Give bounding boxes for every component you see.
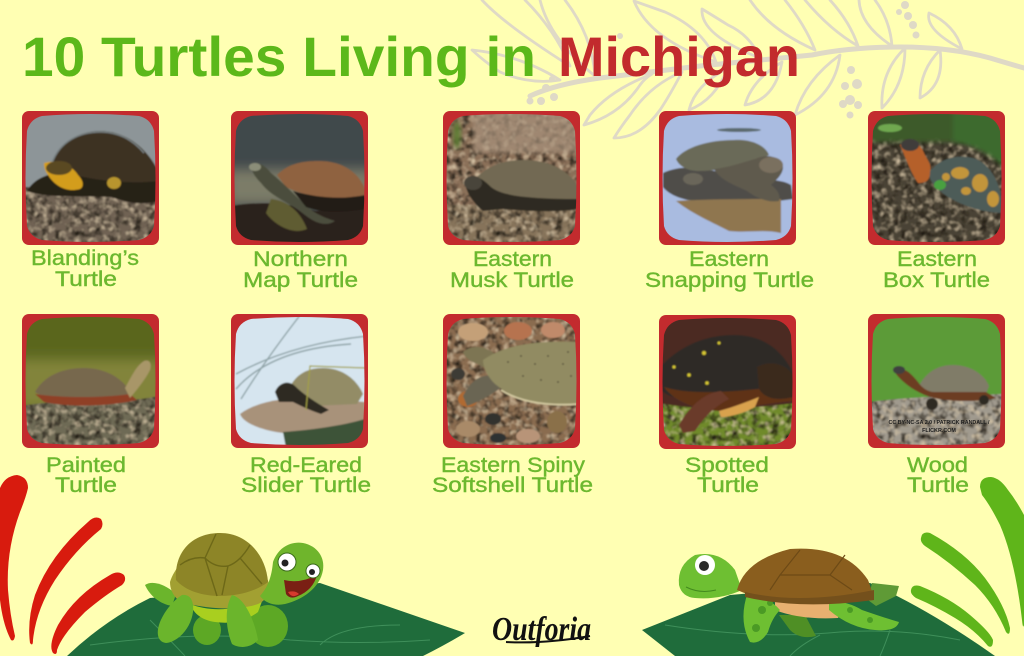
right cartoon turtle — [679, 549, 899, 643]
label: Eastern Spiny Softshell Turtle — [432, 454, 593, 497]
photo: Blanding's Turtle — [22, 111, 159, 245]
title — [22, 25, 800, 88]
label: Wood Turtle — [907, 454, 969, 497]
label: Red-Eared Slider Turtle: Slider Turtle — [241, 474, 371, 497]
label: Painted Turtle — [46, 454, 126, 497]
label: Eastern Spiny Softshell Turtle: Eastern Spiny — [441, 454, 586, 477]
photo: Eastern Snapping Turtle — [659, 111, 796, 245]
panel: Wood Turtle — [868, 314, 1005, 492]
label: Blanding's Turtle: Blanding’s — [31, 247, 139, 270]
panel: Eastern Box Turtle — [868, 111, 1005, 288]
red grass strokes — [0, 475, 125, 654]
photo: Red-Eared Slider Turtle — [231, 314, 368, 448]
panel: Eastern Snapping Turtle — [645, 106, 814, 292]
label: Northern Map Turtle: Northern — [253, 248, 348, 271]
panel: Eastern Spiny Softshell Turtle — [432, 309, 593, 497]
title: Michigan — [558, 25, 800, 88]
panel: Painted Turtle — [22, 314, 159, 492]
photo credit: CC BY-NC-SA 2.0 / PATRICK RANDALL / — [888, 420, 990, 426]
panel: Spotted Turtle — [659, 315, 796, 492]
label: Northern Map Turtle — [243, 248, 358, 292]
logo: Outforia: Outforia — [492, 611, 591, 648]
label: Painted Turtle: Turtle — [55, 474, 117, 497]
panel: Northern Map Turtle — [226, 106, 373, 292]
photo: Painted Turtle — [22, 314, 159, 448]
label: Northern Map Turtle: Map Turtle — [243, 269, 358, 292]
label: Spotted Turtle: Turtle — [697, 474, 759, 497]
title: 10 Turtles Living in — [22, 25, 536, 88]
label: Eastern Musk Turtle: Eastern — [473, 248, 552, 271]
label: Eastern Box Turtle: Eastern — [897, 248, 977, 271]
label: Red-Eared Slider Turtle — [241, 454, 371, 497]
label: Blanding's Turtle: Turtle — [55, 268, 117, 291]
photo: Eastern Spiny Softshell Turtle — [443, 314, 580, 448]
photo: Eastern Box Turtle — [868, 111, 1005, 245]
label: Eastern Snapping Turtle: Snapping Turtle — [645, 269, 814, 292]
label: Red-Eared Slider Turtle: Red-Eared — [250, 454, 362, 477]
green grass strokes — [911, 477, 1024, 647]
photo: Spotted Turtle — [659, 315, 796, 449]
label: Blanding's Turtle — [31, 247, 139, 291]
panel: Blanding's Turtle — [22, 111, 159, 286]
left cartoon turtle — [145, 533, 323, 647]
label: Eastern Box Turtle — [883, 248, 990, 292]
label: Painted Turtle: Painted — [46, 454, 126, 477]
label: Eastern Musk Turtle: Musk Turtle — [450, 269, 574, 292]
photo credit — [888, 420, 990, 432]
panel: Red-Eared Slider Turtle — [226, 309, 373, 497]
label: Wood Turtle: Turtle — [907, 474, 969, 497]
label: Eastern Spiny Softshell Turtle: Softshell Turtle — [432, 474, 593, 497]
label: Eastern Snapping Turtle — [645, 248, 814, 292]
label: Spotted Turtle — [685, 454, 769, 497]
label: Eastern Musk Turtle — [450, 248, 574, 292]
photo credit: FLICKR.COM — [922, 428, 956, 434]
photo: Wood Turtle — [868, 314, 1005, 448]
label: Wood Turtle: Wood — [907, 454, 968, 477]
photo: Northern Map Turtle — [231, 111, 368, 245]
panel: Eastern Musk Turtle — [443, 111, 580, 288]
label: Spotted Turtle: Spotted — [685, 454, 769, 477]
left lily leaf — [67, 583, 465, 656]
decorative fern leaf — [472, 0, 1024, 138]
photo: Eastern Musk Turtle — [443, 111, 580, 245]
label: Eastern Snapping Turtle: Eastern — [689, 248, 769, 271]
right lily leaf — [642, 583, 995, 656]
label: Eastern Box Turtle: Box Turtle — [883, 269, 990, 292]
